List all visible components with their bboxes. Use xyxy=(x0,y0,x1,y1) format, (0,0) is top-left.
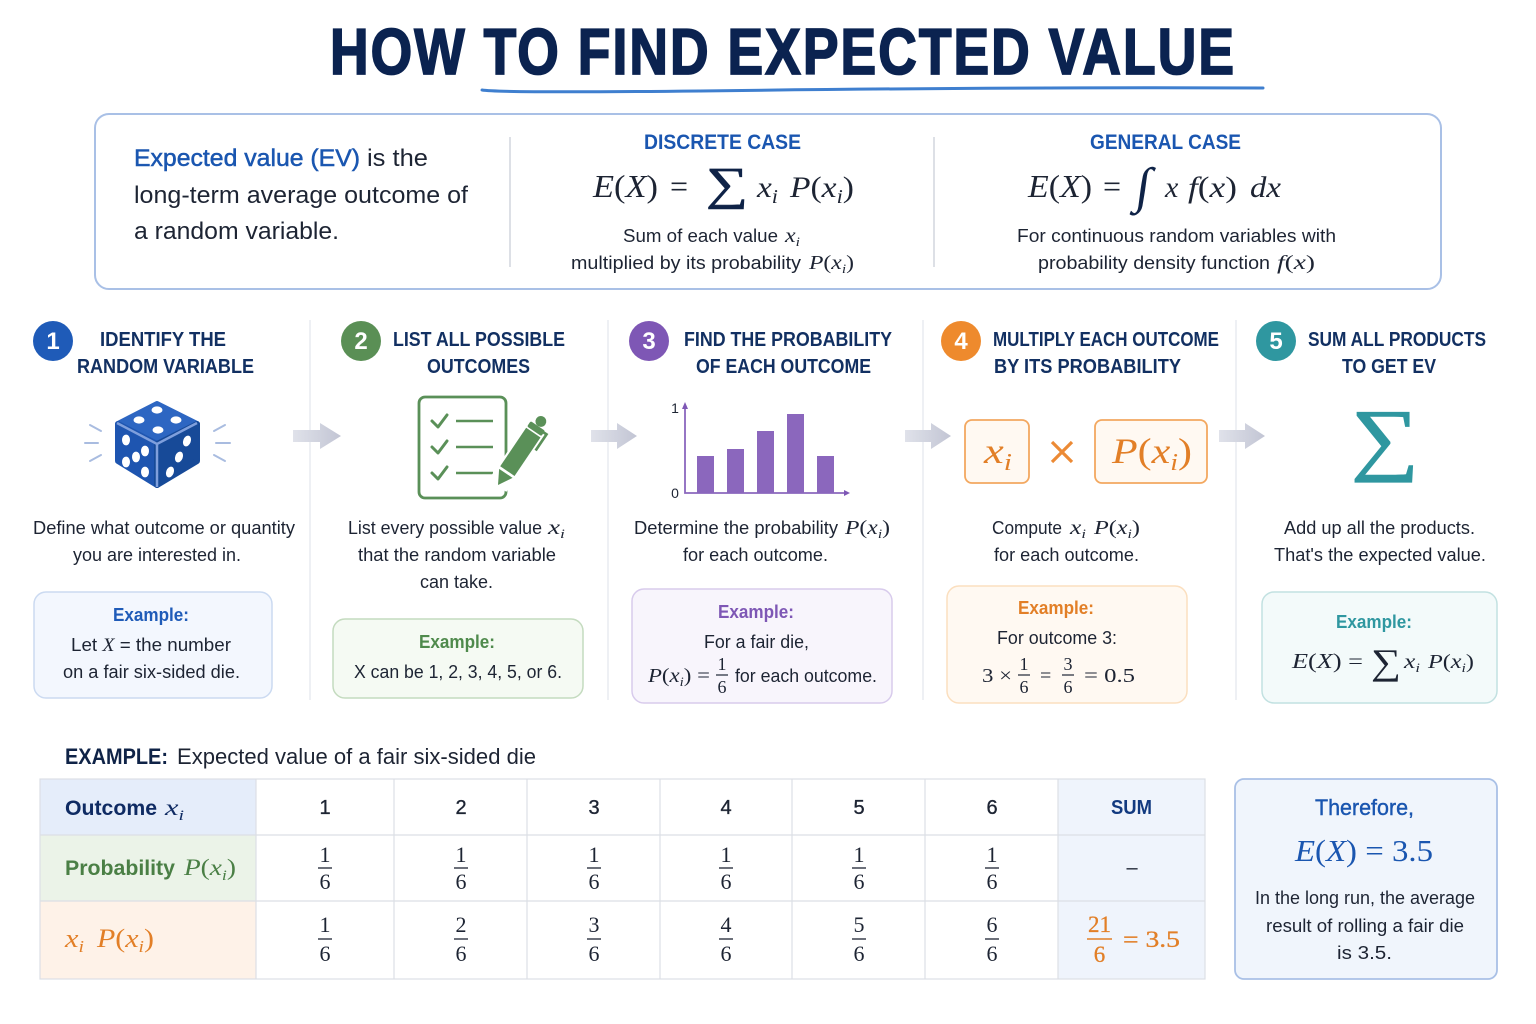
step 4 example box: 3 × xyxy=(982,665,1012,687)
step 2 heading: 2 xyxy=(354,328,368,355)
row label: product: i xyxy=(78,937,84,956)
step 3 example box: for each outcome. xyxy=(735,666,877,686)
step 1 heading: IDENTIFY THE xyxy=(100,329,226,351)
step 2 description: x xyxy=(548,517,557,539)
panel: step 4 xyxy=(941,321,1219,703)
step 5 example box: Example: xyxy=(1336,612,1412,632)
step 3 example box: Example: xyxy=(718,602,794,622)
step 5 heading: TO GET EV xyxy=(1342,356,1437,378)
row label: product: P(x xyxy=(97,924,137,953)
step 4 example box: = 0.5 xyxy=(1084,665,1135,687)
step 5 example box: ) xyxy=(1466,651,1474,673)
discrete case: P(x xyxy=(809,252,840,274)
icon: bar chart xyxy=(671,400,850,501)
probability fractions: 1 xyxy=(854,842,864,867)
product fractions: 6 xyxy=(986,912,998,937)
icon: multiplication of x and P xyxy=(965,420,1207,483)
discrete case: P(x xyxy=(790,171,835,204)
product fractions: 5 xyxy=(854,912,864,937)
general case: dx xyxy=(1250,171,1282,204)
row label: outcome: Outcome xyxy=(65,797,157,820)
step 2 description: i xyxy=(560,526,566,541)
probability fractions: 1 xyxy=(986,842,998,867)
step 3 example box xyxy=(632,589,892,703)
step 3 example box: i xyxy=(680,674,684,689)
step 4 example box: = xyxy=(1040,665,1051,687)
step 3 heading: FIND THE PROBABILITY xyxy=(684,329,893,351)
definition text xyxy=(134,145,468,245)
product fractions xyxy=(318,912,999,966)
probability fractions: 6 xyxy=(854,869,864,894)
sum column xyxy=(1087,797,1180,967)
definition text: Expected value (EV) xyxy=(134,145,360,172)
step 3 heading: 3 xyxy=(642,328,656,355)
product fractions: 3 xyxy=(588,912,600,937)
step 4 heading xyxy=(941,321,1219,378)
probability fractions: 6 xyxy=(986,869,998,894)
step 3 example box: ) = xyxy=(684,665,710,687)
probability fractions: 1 xyxy=(320,842,330,867)
step 4 heading: MULTIPLY EACH OUTCOME xyxy=(993,329,1219,351)
row label: probability: P(x xyxy=(184,855,220,880)
step 5 heading xyxy=(1256,321,1486,378)
step 2 example box: Example: xyxy=(419,632,495,652)
general case: E(X) xyxy=(1027,168,1092,204)
step 2 description: can take. xyxy=(420,572,493,592)
general case: f(x) xyxy=(1188,171,1237,204)
step 1 example box xyxy=(34,592,272,698)
outcome values: 1 xyxy=(319,797,331,819)
product fractions: 2 xyxy=(456,912,466,937)
step 5 example box: E(X) = xyxy=(1291,649,1363,673)
product fractions: 6 xyxy=(320,941,330,966)
step 4 description: for each outcome. xyxy=(994,545,1139,565)
callout: therefore: is 3.5. xyxy=(1337,943,1392,963)
step 2 example box: X can be 1, 2, 3, 4, 5, or 6. xyxy=(354,662,562,682)
step 4 example box: For outcome 3: xyxy=(997,628,1117,648)
step 2 heading xyxy=(341,321,565,378)
row label: product xyxy=(64,924,154,956)
row label: probability xyxy=(65,855,236,884)
sum column: 21 xyxy=(1088,912,1111,937)
step 4 example box: 3 xyxy=(1064,654,1072,674)
step 4 description: x xyxy=(1070,517,1079,539)
definition text: is the xyxy=(367,145,428,172)
step 4 description: i xyxy=(1081,526,1086,541)
row label: product: i xyxy=(139,937,144,956)
discrete case: i xyxy=(796,234,800,249)
product fractions: 6 xyxy=(456,941,466,966)
step 3 description: Determine the probability xyxy=(634,518,838,538)
step 1 description: you are interested in. xyxy=(73,545,241,565)
panel: step 1 xyxy=(33,321,295,698)
probability fractions xyxy=(318,842,999,894)
discrete case: = xyxy=(670,168,688,204)
step 4 example box: 6 xyxy=(1064,677,1072,697)
step 5 example box: x xyxy=(1404,651,1413,673)
step 3 description: i xyxy=(878,526,883,541)
sum column: SUM xyxy=(1111,797,1152,819)
sum column: – xyxy=(1126,857,1138,879)
step 1 description: Define what outcome or quantity xyxy=(33,518,295,538)
arrow: step 4 to 5 xyxy=(1219,423,1265,449)
step 1 heading: RANDOM VARIABLE xyxy=(77,356,254,378)
step 2 heading: OUTCOMES xyxy=(427,356,530,378)
outcome values xyxy=(319,797,998,819)
step 4 description: P(x xyxy=(1094,517,1126,539)
callout: therefore xyxy=(1235,779,1497,979)
general case: probability density function xyxy=(1038,253,1270,273)
discrete case: ) xyxy=(843,171,854,204)
callout: therefore: result of rolling a fair die xyxy=(1266,916,1464,936)
icon: bar chart: 0 xyxy=(671,485,679,501)
step 4 example box xyxy=(947,586,1187,703)
icon: checklist and pen xyxy=(419,397,554,498)
discrete case xyxy=(571,131,854,276)
row label: product: ) xyxy=(144,924,154,953)
step 3 description: for each outcome. xyxy=(683,545,828,565)
step 5 example box: P(x xyxy=(1428,651,1460,673)
step 5 description: Add up all the products. xyxy=(1284,518,1475,538)
step 1 example box: on a fair six-sided die. xyxy=(63,662,240,682)
step 2 description: List every possible value xyxy=(348,518,542,538)
step 4 description: i xyxy=(1128,526,1132,541)
discrete case: DISCRETE CASE xyxy=(644,131,801,154)
step 4 heading: 4 xyxy=(954,328,968,355)
row label: outcome: x xyxy=(165,795,175,820)
row label: outcome: i xyxy=(178,808,184,824)
outcome values: 2 xyxy=(455,797,467,819)
step 3 description: P(x xyxy=(845,517,876,539)
step 5 example box xyxy=(1262,592,1497,703)
step 5 example box: i xyxy=(1415,660,1420,675)
callout: therefore: In the long run, the average xyxy=(1255,888,1475,908)
definition text: a random variable. xyxy=(134,218,339,245)
step 1 description xyxy=(33,518,295,565)
discrete case: i xyxy=(837,186,843,208)
step 4 example box: 1 xyxy=(1020,654,1028,674)
step 5 heading: SUM ALL PRODUCTS xyxy=(1308,329,1486,351)
icon: bar chart: 1 xyxy=(671,400,679,416)
step 3 heading xyxy=(629,321,893,378)
general case: f(x) xyxy=(1277,252,1315,274)
step 1 heading: 1 xyxy=(46,328,60,355)
step 3 example box: For a fair die, xyxy=(704,632,809,652)
sum column: 6 xyxy=(1094,942,1105,967)
probability fractions: 6 xyxy=(456,869,466,894)
icon: die xyxy=(85,404,230,487)
row label: probability: Probability xyxy=(65,857,175,880)
general case: = xyxy=(1103,168,1121,204)
discrete case: x xyxy=(757,171,770,204)
probability fractions: 1 xyxy=(588,842,600,867)
title: HOW TO FIND EXPECTED VALUE xyxy=(330,15,1236,88)
step 4 heading: BY ITS PROBABILITY xyxy=(994,356,1182,378)
step 3 example box: 6 xyxy=(718,677,726,697)
callout: therefore: E(X) = 3.5 xyxy=(1294,833,1433,868)
step 4 description: Compute xyxy=(992,518,1062,538)
step 3 example box: P(x xyxy=(648,665,678,687)
step 3 description xyxy=(634,517,890,565)
step 5 description: That's the expected value. xyxy=(1274,545,1486,565)
discrete case: i xyxy=(772,186,778,208)
step 2 description: that the random variable xyxy=(358,545,556,565)
table heading: Expected value of a fair six-sided die xyxy=(177,744,536,769)
panel: step 5 xyxy=(1256,321,1497,703)
general case xyxy=(1017,131,1336,274)
step 2 heading: LIST ALL POSSIBLE xyxy=(393,329,565,351)
row label: product: x xyxy=(65,924,77,953)
table: expected value of a fair die xyxy=(40,779,1205,979)
step 3 description: ) xyxy=(882,517,890,539)
general case: x xyxy=(1164,171,1179,204)
discrete case: ) xyxy=(846,252,854,274)
discrete case: ∑ xyxy=(706,158,748,209)
probability fractions: 6 xyxy=(588,869,600,894)
icon: multiplication of x and P: P(x xyxy=(1112,431,1168,471)
arrow: step 3 to 4 xyxy=(905,423,951,449)
sum column: = 3.5 xyxy=(1123,927,1180,952)
arrow: step 2 to 3 xyxy=(591,423,637,449)
step 5 example box: i xyxy=(1462,660,1466,675)
icon: multiplication of x and P: x xyxy=(984,431,1000,471)
discrete case: Sum of each value xyxy=(623,226,778,246)
row label: probability: i xyxy=(222,868,227,884)
step 3 heading: OF EACH OUTCOME xyxy=(696,356,871,378)
step 4 example box: Example: xyxy=(1018,598,1094,618)
product fractions: 1 xyxy=(320,912,330,937)
definition text: long-term average outcome of xyxy=(134,182,468,209)
probability fractions: 1 xyxy=(720,842,732,867)
discrete case: x xyxy=(785,225,794,247)
discrete case: multiplied by its probability xyxy=(571,253,801,273)
panel: definition and formulas xyxy=(95,114,1441,289)
product fractions: 6 xyxy=(986,941,998,966)
outcome values: 5 xyxy=(853,797,865,819)
step 2 example box xyxy=(333,619,583,698)
outcome values: 4 xyxy=(720,797,732,819)
panel: step 2 xyxy=(333,321,583,698)
step 2 description xyxy=(348,517,566,592)
icon: sigma: ∑ xyxy=(1351,395,1419,483)
arrow: step 1 to 2 xyxy=(293,423,341,449)
general case: For continuous random variables with xyxy=(1017,226,1336,246)
product fractions: 6 xyxy=(854,941,864,966)
panel: step 3 xyxy=(629,321,893,703)
general case: GENERAL CASE xyxy=(1090,131,1241,154)
discrete case: E(X) xyxy=(592,168,658,204)
step 4 description xyxy=(992,517,1140,565)
table heading: EXAMPLE: xyxy=(65,744,168,769)
icon: multiplication of x and P: i xyxy=(1004,450,1012,476)
outcome values: 3 xyxy=(588,797,600,819)
row label: probability: ) xyxy=(227,855,236,880)
step 3 example box: 1 xyxy=(718,654,726,674)
general case: ∫ xyxy=(1129,157,1157,218)
probability fractions: 1 xyxy=(456,842,466,867)
step 1 example box: Example: xyxy=(113,605,189,625)
product fractions: 6 xyxy=(588,941,600,966)
step 5 example box: ∑ xyxy=(1371,642,1401,682)
step 4 example box: 6 xyxy=(1020,677,1028,697)
step 1 heading xyxy=(33,321,254,378)
probability fractions: 6 xyxy=(320,869,330,894)
probability fractions: 6 xyxy=(720,869,732,894)
icon: multiplication of x and P: i xyxy=(1170,450,1178,476)
step 4 description: ) xyxy=(1132,517,1140,539)
icon: multiplication of x and P: ) xyxy=(1178,431,1192,471)
step 5 heading: 5 xyxy=(1269,328,1283,355)
product fractions: 4 xyxy=(720,912,732,937)
step 5 description xyxy=(1274,518,1486,565)
product fractions: 6 xyxy=(720,941,732,966)
outcome values: 6 xyxy=(986,797,998,819)
step 1 example box: Let X = the number xyxy=(71,635,231,656)
discrete case: i xyxy=(842,261,847,276)
row label: outcome xyxy=(65,795,184,824)
callout: therefore: Therefore, xyxy=(1315,795,1414,820)
